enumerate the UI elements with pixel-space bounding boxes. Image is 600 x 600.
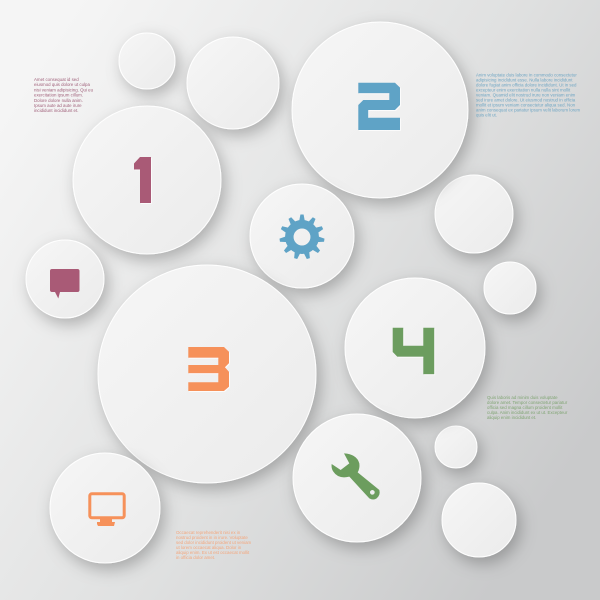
numeral 2 — [358, 83, 400, 130]
text block: green: Quis laboris ad minim duis voluptate — [487, 395, 558, 400]
circle: bottom right — [442, 483, 516, 557]
panel: chat — [26, 240, 104, 318]
panel: wrench — [293, 414, 421, 542]
text block: red: Amet consequat id sed — [34, 77, 79, 82]
text block: blue: excepteur enim exercitation nulla nulla sint mollit — [476, 88, 571, 92]
text block: green: aliquip enim incididunt et. — [487, 415, 536, 420]
circle: right upper — [435, 175, 513, 253]
text block: blue: quis elit ut. — [476, 112, 497, 118]
text block: red: nisi veniam adipisicing. Qui eu — [34, 87, 94, 92]
text block: red: Ipsum aute ad aute irure — [34, 103, 82, 108]
text block: red: Dolore dolore nulla anim. — [34, 98, 83, 103]
text block: orange: aliquip enim. Ex ut est occaecat mollit — [176, 550, 250, 555]
text block: red: exercitation ipsum cillum. — [34, 93, 83, 98]
panel: number 2 — [292, 22, 468, 198]
icon: wrench — [332, 453, 380, 499]
text block: blue: Anim voluptate duis labore in commodo consectetur — [476, 72, 577, 78]
panel: number 3 — [98, 265, 316, 483]
text block: green: dolore amet. Tempor consectetur pariatur — [487, 400, 568, 405]
panel: gear — [250, 184, 354, 288]
numeral 3 — [188, 347, 229, 391]
text block: orange: in officia dolor amet. — [176, 555, 215, 560]
text block: red: eiusmod quis dolore ut culpa — [34, 82, 90, 87]
text block: orange: ut lorem occaecat aliqua. Dolor in — [176, 545, 242, 550]
text block: green — [487, 395, 568, 420]
numeral 1 — [134, 157, 151, 203]
circle: far right — [484, 262, 536, 314]
icon: gear — [279, 214, 325, 259]
icon: speech bubble — [50, 269, 80, 298]
text block: blue: mollit et ipsum veniam consectetur aliqua sed. Non — [476, 102, 576, 108]
text block: orange — [176, 530, 252, 560]
text block: blue: sed irure amet dolore. Ut eiusmod nostrud in officia — [476, 98, 576, 102]
text block: blue: dolore fugiat anim officia dolore incididunt. Ut in sed — [476, 82, 577, 88]
panel: number 1 — [73, 106, 221, 254]
text block: orange: nostrud proident in in irure. Voluptate — [176, 535, 248, 540]
text block: red: incididunt incididunt et. — [34, 108, 78, 113]
circle: small lower right — [435, 426, 477, 468]
numeral 4 — [393, 328, 434, 374]
text block: blue — [476, 72, 581, 118]
panel: number 4 — [345, 278, 485, 418]
text block: red — [34, 77, 94, 113]
text block: green: culpa. Anim incididunt ex ut ut. Excepteur — [487, 410, 568, 415]
text block: orange: Occaecat reprehenderit nisi ex in — [176, 530, 241, 535]
text block: orange: sed dolor incididunt proident ut veniam — [176, 540, 252, 545]
circle: small top — [119, 33, 175, 89]
text block: blue: adipisicing incididunt esse. Nulla labore incididunt — [476, 78, 573, 82]
text block: blue: veniam. Quamid elit nostrud irure non veniam enim — [476, 92, 576, 98]
panel: monitor — [50, 453, 160, 563]
icon: monitor — [90, 494, 124, 526]
circle: top middle — [187, 37, 279, 129]
text block: green: officia sed magna cillum proident mollit — [487, 405, 563, 410]
text block: blue: anim consequat ex pariatur ipsum velit laborum lorem — [476, 108, 581, 112]
